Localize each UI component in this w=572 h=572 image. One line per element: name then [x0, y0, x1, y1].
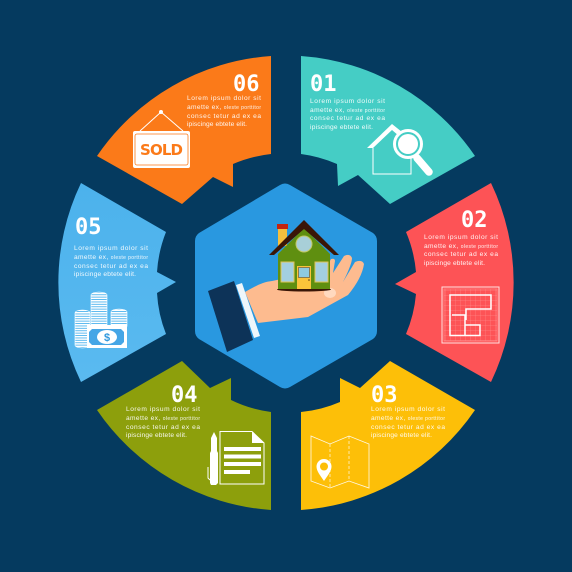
text block 05: amette ex, oleste porttitor — [74, 254, 148, 261]
text block 05: consec tetur ad ex ea — [74, 263, 148, 270]
text block 06: Lorem ipsum dolor sit — [187, 95, 261, 102]
text block 06: ipiscinge ebtete elit. — [187, 121, 247, 128]
icon: sold sign: SOLD — [140, 141, 183, 159]
text block 01: Lorem ipsum dolor sit — [310, 98, 385, 105]
text block 01 — [310, 98, 385, 131]
number 01: 01 — [310, 72, 336, 97]
text block 06 — [187, 95, 261, 128]
panel: 05 money — [58, 183, 176, 382]
icon: hand — [245, 255, 364, 323]
number 04: 04 — [171, 383, 198, 408]
text block 04: ipiscinge ebtete elit. — [126, 432, 187, 439]
text block 05: Lorem ipsum dolor sit — [74, 245, 148, 252]
text block 06: amette ex, oleste porttitor — [187, 104, 261, 111]
text block 03: Lorem ipsum dolor sit — [371, 406, 445, 413]
text block 03: amette ex, oleste porttitor — [371, 415, 445, 422]
text block 05: ipiscinge ebtete elit. — [74, 271, 136, 278]
text block 02 — [424, 234, 498, 267]
panel: 01 search — [301, 56, 475, 204]
text block 02: Lorem ipsum dolor sit — [424, 234, 498, 241]
text block 04: Lorem ipsum dolor sit — [126, 406, 200, 413]
icon: coins and banknote — [75, 292, 127, 348]
panel: 06 sold — [97, 56, 271, 204]
icon: house — [269, 220, 339, 292]
icon: sleeve — [208, 281, 253, 352]
panel shape: blue segment — [58, 183, 176, 382]
panel: central hexagon — [195, 184, 377, 388]
panel: 02 floor plan — [395, 183, 514, 382]
icon: sold sign — [133, 110, 190, 168]
text block 01: consec tetur ad ex ea — [310, 115, 385, 122]
text block 03: consec tetur ad ex ea — [371, 424, 445, 431]
text block 04: amette ex, oleste porttitor — [126, 415, 200, 422]
text block 05 — [74, 245, 148, 278]
hexagon — [195, 184, 377, 388]
panel shape: red segment — [395, 183, 514, 382]
icon: shirt cuff — [236, 283, 260, 338]
text block 02: amette ex, oleste porttitor — [424, 243, 498, 250]
text block 04: consec tetur ad ex ea — [126, 424, 200, 431]
icon: house with magnifier — [367, 124, 429, 174]
text block 01: amette ex, oleste porttitor — [310, 107, 385, 114]
number 02: 02 — [461, 208, 488, 233]
icon: coins and banknote: $ — [104, 332, 110, 344]
number 03: 03 — [371, 383, 398, 408]
text block 04 — [126, 406, 200, 439]
text block 06: consec tetur ad ex ea — [187, 113, 261, 120]
text block 03: ipiscinge ebtete elit. — [371, 432, 432, 439]
panel shape: orange segment — [97, 56, 271, 204]
icon: document and pen — [208, 432, 264, 485]
panel: 04 document — [97, 361, 271, 510]
text block 02: consec tetur ad ex ea — [424, 251, 498, 258]
text block 01: ipiscinge ebtete elit. — [310, 124, 373, 131]
icon: floor plan — [442, 287, 499, 343]
number 06: 06 — [233, 72, 260, 97]
panel shape: teal segment — [301, 56, 475, 204]
panel: 03 map — [301, 361, 475, 510]
icon: map with pin — [311, 436, 369, 488]
panel shape: green segment — [97, 361, 271, 510]
text block 03 — [371, 406, 445, 439]
number 05: 05 — [75, 215, 102, 240]
panel shape: yellow segment — [301, 361, 475, 510]
text block 02: ipiscinge ebtete elit. — [424, 260, 485, 267]
